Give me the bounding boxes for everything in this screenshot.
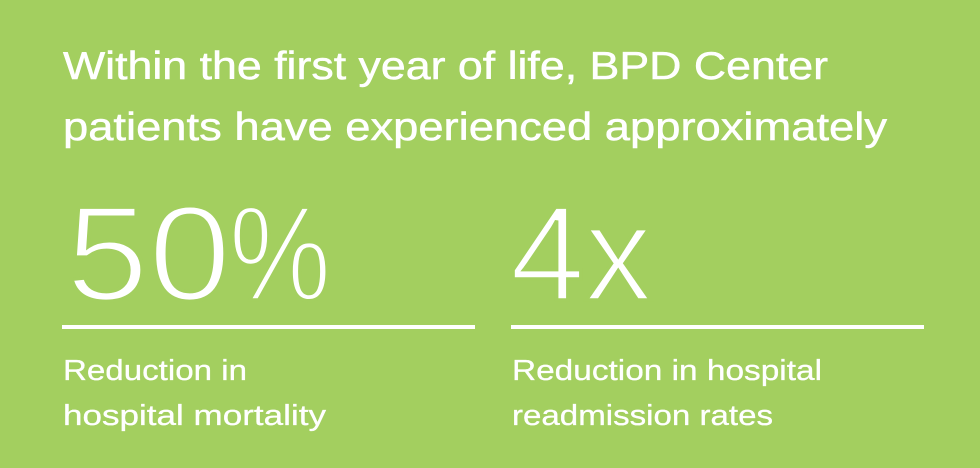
label: hospital mortality: Reduction in xyxy=(63,355,247,387)
stat: 50%: % xyxy=(229,178,331,329)
heading xyxy=(63,45,888,149)
label: hospital mortality xyxy=(63,355,327,432)
stat: 4x: 4x xyxy=(510,178,652,329)
heading: patients have experienced approximately xyxy=(63,106,888,149)
stat: 50% xyxy=(66,178,331,329)
heading: Within the first year of life, BPD Center xyxy=(63,45,828,88)
label: readmission rates: readmission rates xyxy=(512,400,773,432)
label: readmission rates xyxy=(512,355,822,432)
divider right xyxy=(511,325,924,329)
divider left xyxy=(62,325,475,329)
label: hospital mortality: hospital mortality xyxy=(63,400,327,432)
label: readmission rates: Reduction in hospital xyxy=(512,355,822,387)
stat: 50%: 50 xyxy=(66,178,231,329)
